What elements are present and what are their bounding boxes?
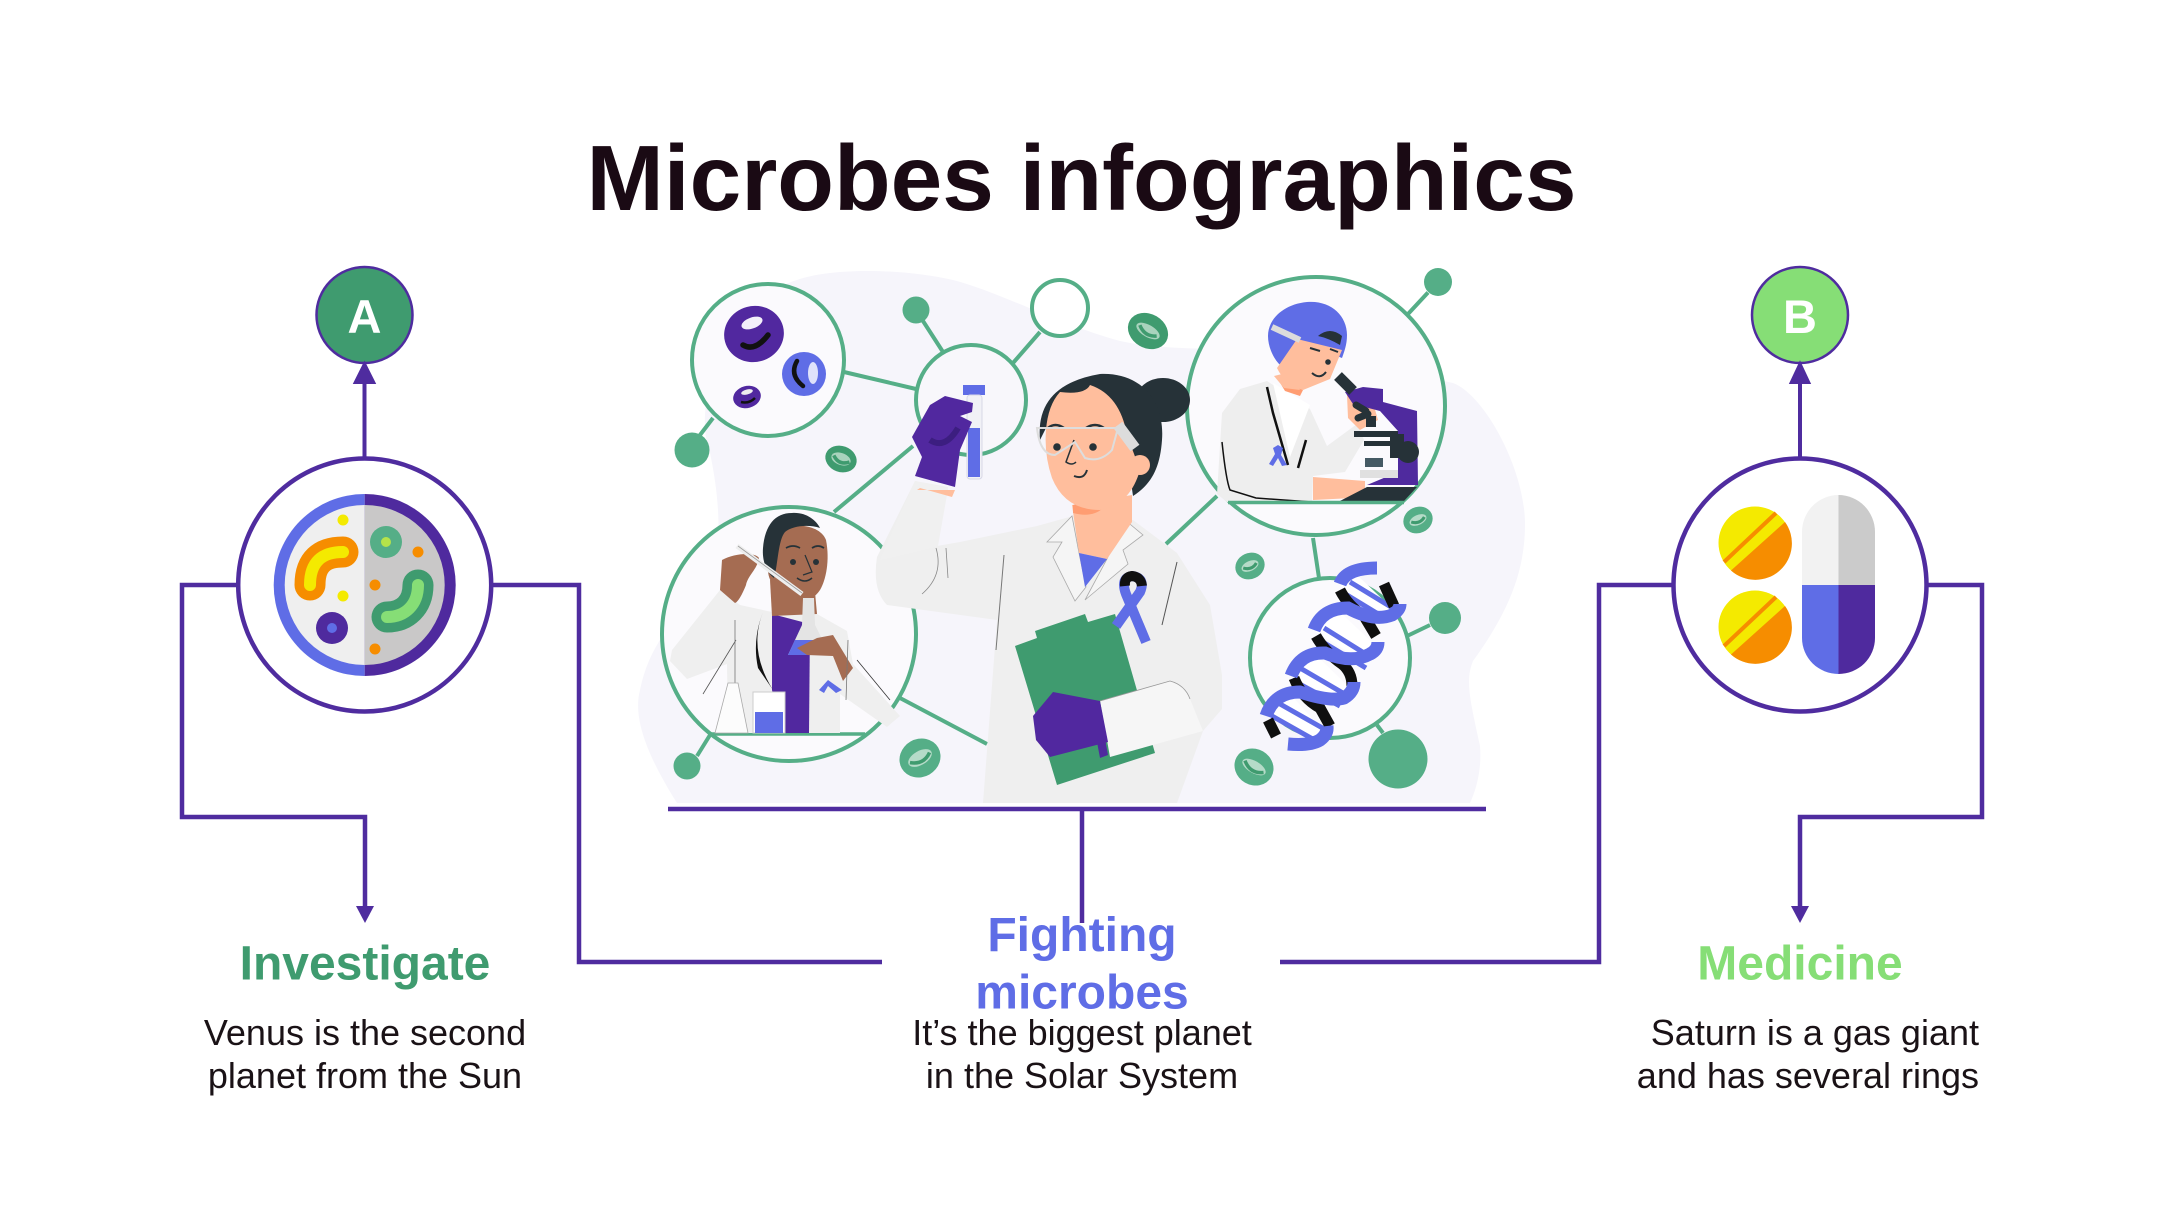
text block: medicine <box>1637 1012 1979 1096</box>
lower hand glove <box>1033 692 1108 757</box>
face <box>1046 385 1140 510</box>
scientist with flask bubble <box>662 507 916 761</box>
heading: investigate: Investigate <box>240 938 490 990</box>
network dots <box>674 268 1461 788</box>
DNA bubble and helix <box>1250 568 1410 745</box>
main scientist <box>876 374 1222 803</box>
icon: badge A: A <box>348 290 381 343</box>
text block: investigate: planet from the Sun <box>208 1055 522 1096</box>
text block: medicine: and has several rings <box>1637 1055 1979 1096</box>
icon: badge B: B <box>1783 290 1817 343</box>
text block: fighting microbes <box>912 1012 1252 1096</box>
panel: medicine <box>1280 267 1982 1096</box>
test tube bubble <box>916 345 1026 455</box>
neck and shirt <box>1072 495 1132 559</box>
microscope scientist bubble <box>1187 277 1445 535</box>
test tube <box>963 385 985 395</box>
background blob <box>638 271 1525 803</box>
text block: medicine: Saturn is a gas giant <box>1651 1012 1979 1053</box>
network connectors <box>697 292 1430 756</box>
connector lines <box>1800 585 1982 906</box>
sleeve <box>1100 681 1203 757</box>
heading: fighting microbes <box>975 909 1189 1020</box>
connector to center heading <box>1280 585 1674 962</box>
text block: fighting microbes: in the Solar System <box>926 1055 1238 1096</box>
text block: investigate: Venus is the second <box>204 1012 526 1053</box>
clipboard <box>1015 614 1155 785</box>
bacteria bubble <box>692 284 844 436</box>
panel: fighting microbes <box>912 909 1252 1096</box>
lapels <box>1047 516 1086 601</box>
heading: fighting microbes: Fighting <box>987 909 1177 962</box>
title: Microbes infographics <box>586 126 1576 230</box>
arrow up to badge <box>356 365 373 457</box>
upper hand glove <box>912 396 973 487</box>
text block: investigate <box>204 1012 526 1096</box>
ribbon <box>1116 576 1146 642</box>
panel: center connector <box>668 809 1486 923</box>
icon: badge A <box>316 267 412 363</box>
heading: fighting microbes: microbes <box>975 966 1189 1020</box>
empty node <box>1032 280 1088 336</box>
arrow down to heading <box>356 906 374 923</box>
central illustration <box>638 268 1525 803</box>
connector to center heading <box>491 585 882 962</box>
free-floating microbes <box>822 306 1437 793</box>
heading: medicine: Medicine <box>1697 938 1903 990</box>
hair back and bun <box>1136 378 1190 422</box>
arrow down to heading <box>1791 906 1809 923</box>
icon: pills <box>1674 458 1926 712</box>
icon: badge B <box>1752 267 1848 363</box>
arrow up to badge <box>1792 365 1808 457</box>
goggles <box>1037 428 1118 459</box>
panel: investigate <box>182 267 882 1096</box>
icon: petri dish <box>238 458 491 712</box>
text block: fighting microbes: It’s the biggest planet <box>912 1012 1252 1053</box>
connector lines <box>182 585 365 906</box>
